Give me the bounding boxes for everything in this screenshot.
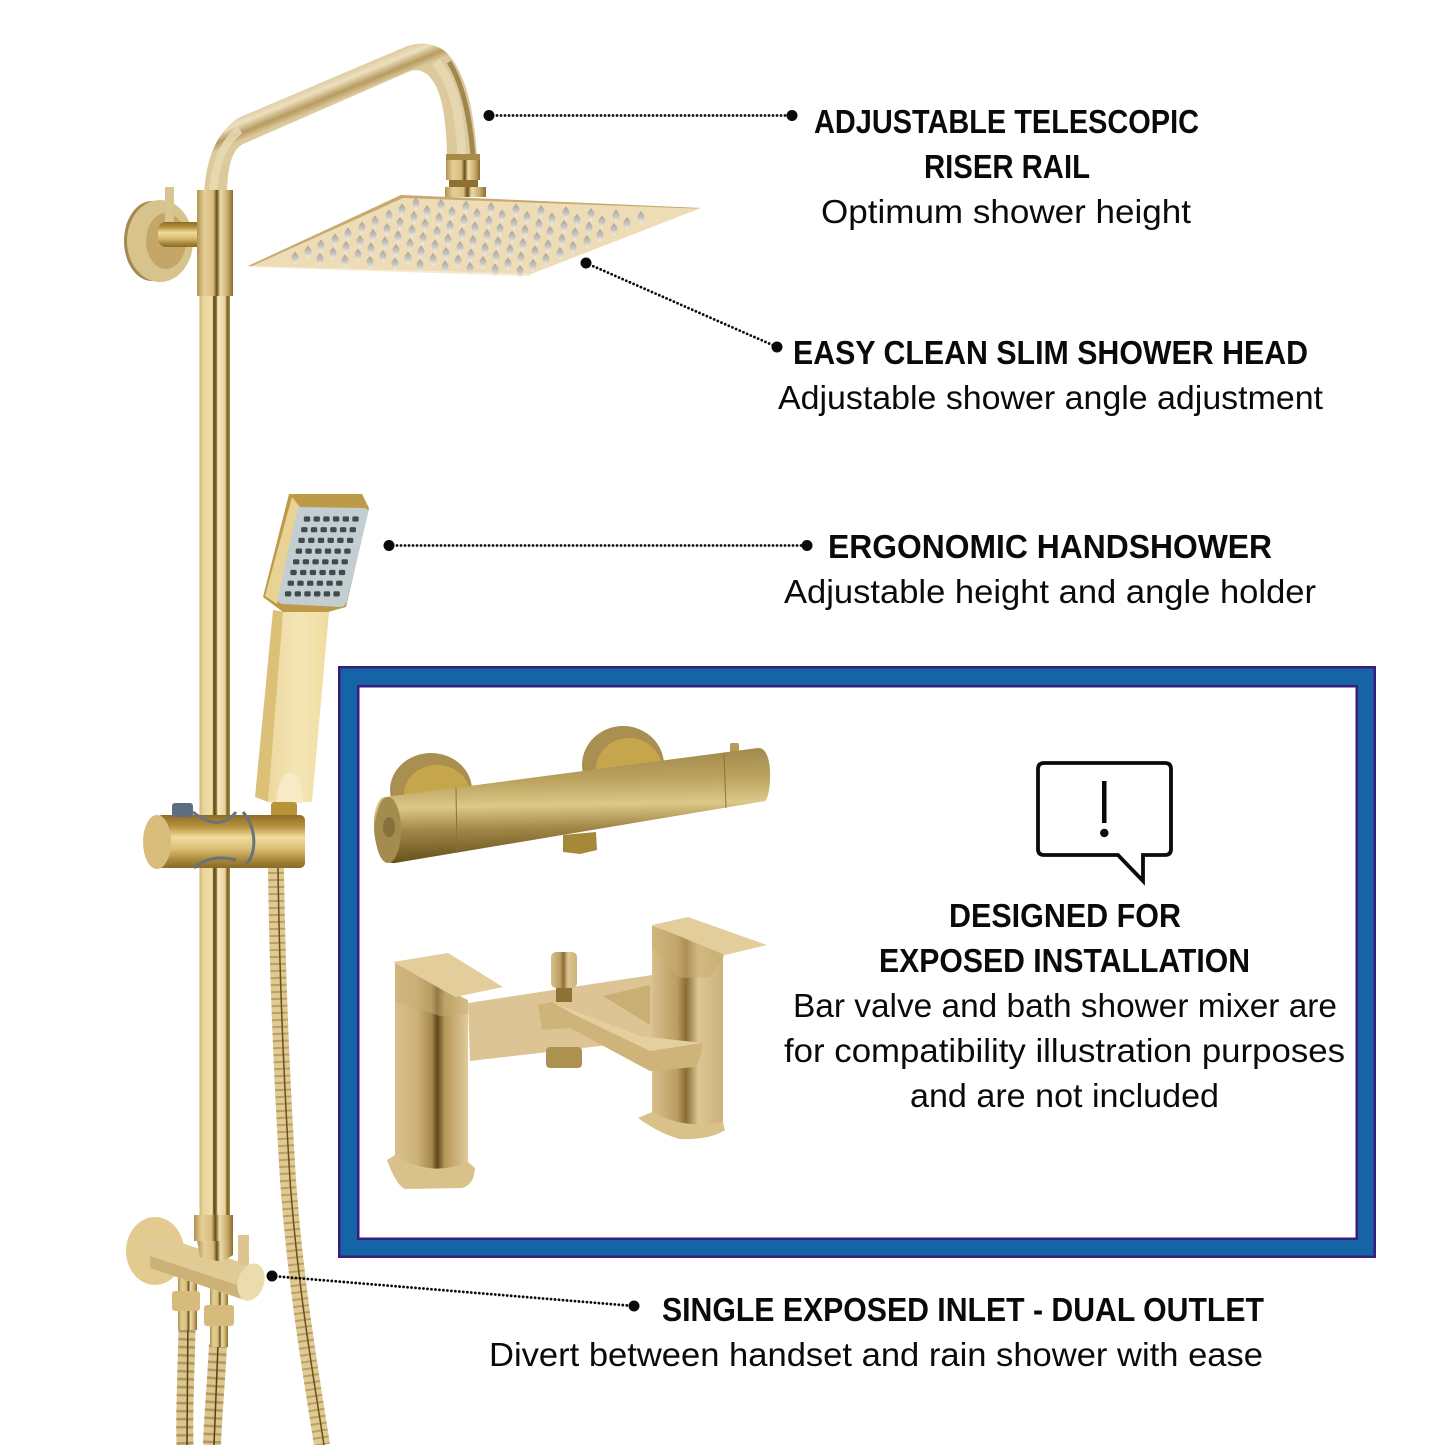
handset handle [255, 610, 285, 802]
icon: exclamation speech bubble [1038, 763, 1171, 881]
thermostatic bar valve [374, 726, 770, 863]
leader line: handshower [384, 540, 812, 551]
hose: main flexible hose [276, 865, 324, 1445]
callout: single exposed inlet dual outlet [489, 1291, 1264, 1373]
wall discs [390, 753, 472, 827]
valve body [141, 1236, 262, 1301]
leader line: shower head [580, 258, 782, 352]
heading: designed for exposed installation: EXPOSED INSTALLATION [879, 942, 1250, 979]
text: compatibility note: Bar valve and bath shower mixer are [793, 987, 1337, 1024]
panel: exposed installation [338, 666, 1376, 1258]
riser rail [200, 290, 230, 1220]
bath shower mixer [387, 917, 767, 1189]
inlet sleeve [197, 1240, 233, 1262]
leader line: riser rail [484, 110, 798, 121]
shower head nozzles [292, 198, 644, 278]
lower nut [546, 1047, 582, 1068]
end cap [233, 1260, 269, 1304]
slider holder [143, 803, 305, 869]
left lever [393, 953, 503, 997]
panel frame [338, 666, 1376, 1258]
riser rail sleeve [197, 190, 233, 296]
callout: adjustable telescopic riser rail: Optimum shower height [821, 193, 1191, 230]
text: compatibility note: for compatibility illustration purposes [784, 1032, 1345, 1069]
wall bracket: upper [124, 187, 208, 282]
text: compatibility note: and are not included [910, 1077, 1219, 1114]
leader line: outlet [266, 1270, 640, 1312]
bridge [468, 975, 652, 1061]
diverter pin [238, 1235, 249, 1265]
heading: designed for exposed installation: DESIGNED FOR [949, 897, 1181, 934]
diverter knob [551, 952, 577, 1002]
spout [538, 1002, 702, 1071]
left pillar [395, 963, 468, 1171]
right lever [652, 917, 767, 955]
callout: easy clean slim shower head [778, 334, 1323, 416]
callout: single exposed inlet dual outlet: Divert between handset and rain shower with ease [489, 1336, 1263, 1373]
bottom outlet valve [126, 1215, 269, 1445]
hex nut [563, 832, 597, 854]
hand shower [255, 494, 369, 818]
callout: ergonomic handshower: ERGONOMIC HANDSHOWER [828, 528, 1272, 565]
callout: single exposed inlet dual outlet: SINGLE EXPOSED INLET - DUAL OUTLET [662, 1291, 1264, 1328]
callout: adjustable telescopic riser rail [814, 103, 1199, 230]
callout: ergonomic handshower [784, 528, 1316, 610]
top pin [730, 743, 739, 755]
callout: easy clean slim shower head: EASY CLEAN SLIM SHOWER HEAD [793, 334, 1308, 371]
shower head connector [445, 154, 486, 197]
valve bar [374, 748, 770, 863]
handset head [263, 494, 369, 612]
lower right outlet and hose [204, 1285, 234, 1445]
callout: easy clean slim shower head: Adjustable shower angle adjustment [778, 379, 1323, 416]
heading: designed for exposed installation [879, 897, 1250, 979]
lower left outlet and hose [172, 1265, 200, 1445]
callout: adjustable telescopic riser rail: RISER RAIL [924, 148, 1090, 185]
text: compatibility note [784, 987, 1345, 1114]
handset spray nozzles [285, 516, 359, 597]
callout: ergonomic handshower: Adjustable height and angle holder [784, 573, 1316, 610]
handset swivel [276, 773, 303, 803]
shower head plate [248, 195, 701, 278]
telescopic overhead arm [204, 43, 477, 192]
wall plate [126, 1217, 184, 1285]
right pillar [652, 926, 723, 1130]
valve end face [375, 797, 401, 863]
callout: adjustable telescopic riser rail: ADJUSTABLE TELESCOPIC [814, 103, 1199, 140]
